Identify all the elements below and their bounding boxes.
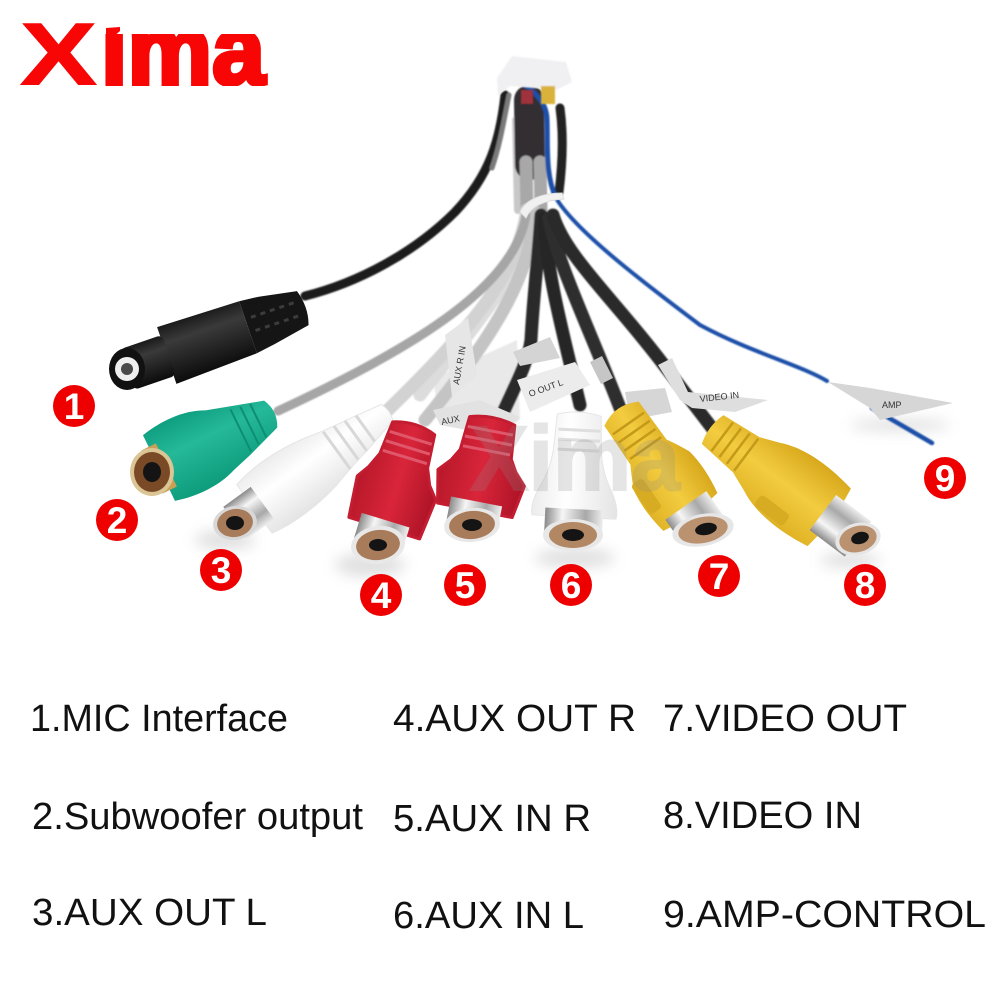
connector 3: white AUX OUT L [210,384,408,550]
connector 7: yellow VIDEO OUT [589,388,736,552]
legend column 3: 9.AMP-CONTROL [663,894,986,936]
legend column 2 [393,698,636,937]
cable: gray pair above strap [526,162,541,210]
cable: microphone black [305,95,509,296]
badge 1 [53,385,95,427]
badge 6: 6 [561,565,581,606]
badge 8 [844,564,886,606]
tag: AUX left: AUX [440,413,461,427]
badge 1: 1 [64,386,84,427]
number badges [53,385,966,616]
tag: AUX OUT R [513,337,560,366]
badge 7: 7 [709,556,729,597]
legend column 2: 5.AUX IN R [393,798,591,840]
cable: white connector gray cable [388,210,527,410]
legend column 2: 4.AUX OUT R [393,698,636,740]
tag: AUX OUT L [517,362,590,412]
cable: yellow 8 black cable [553,215,712,428]
legend column 3: 7.VIDEO OUT [663,698,907,740]
cable tags [433,318,953,436]
cable: red 5 black cable [500,215,541,420]
badge 4: 4 [371,575,392,616]
legend column 1: 3.AUX OUT L [32,892,267,934]
cable: yellow 7 black cable [549,218,620,408]
legend column 3 [663,698,986,936]
logo: Xima: X [20,4,97,104]
tag: video in: VIDEO IN [699,390,740,404]
badge 5 [444,564,486,606]
cable harness [278,75,932,443]
badge 2 [96,499,138,541]
legend column 2: 6.AUX IN L [393,895,584,937]
cable: extra light gray wire [420,215,530,395]
tag: video in [658,358,768,412]
tag: AUX IN R [445,318,477,397]
cable: subwoofer gray cable [278,215,526,411]
cable: second dark bundle [559,108,562,192]
connector 4: red AUX OUT R [340,413,455,568]
cable: blue AMP control wire [513,75,932,443]
badge 7 [698,555,740,597]
tag: AUX OUT L: O OUT L [527,377,564,399]
tag: amp control [828,382,953,420]
connector 8: yellow VIDEO IN [687,396,884,570]
tag: amp control: AMP [882,400,902,410]
badge 3: 3 [211,550,231,591]
badge 6 [550,564,592,606]
tag: AUX IN R: AUX R IN [451,345,468,385]
connector 6: white AUX IN L [530,410,622,551]
wire connector plug [497,56,572,104]
badge 5: 5 [455,565,475,606]
legend column 1: 1.MIC Interface [30,698,288,740]
badge 3 [200,549,242,591]
cable strap [520,193,564,218]
legend list [30,698,986,937]
soft shadows under connectors [195,419,950,577]
tag: video out [625,388,672,420]
badge 9 [924,457,966,499]
badge 4 [360,574,402,616]
legend column 1: 2.Subwoofer output [32,796,363,838]
connector 2: green subwoofer [130,376,292,508]
legend column 1 [30,698,363,934]
cable: dark bundle near the connector [529,100,530,165]
tag background behind cables [433,340,520,433]
cable: left light strip [516,120,518,210]
badge 9: 9 [935,458,955,499]
tag: AUX left [433,400,520,436]
badge 2: 2 [107,500,127,541]
cable: red 4 gray cable [425,212,535,420]
badge 8: 8 [855,565,875,606]
watermark: Xima [470,408,681,510]
connector 1: black mic jack [109,280,316,397]
tag: silver ring on cable [590,356,613,384]
logo: Xima [20,23,268,86]
cable: white 6 black cable [545,218,580,405]
legend column 3: 8.VIDEO IN [663,795,862,837]
connector 5: red AUX IN R [429,409,536,544]
